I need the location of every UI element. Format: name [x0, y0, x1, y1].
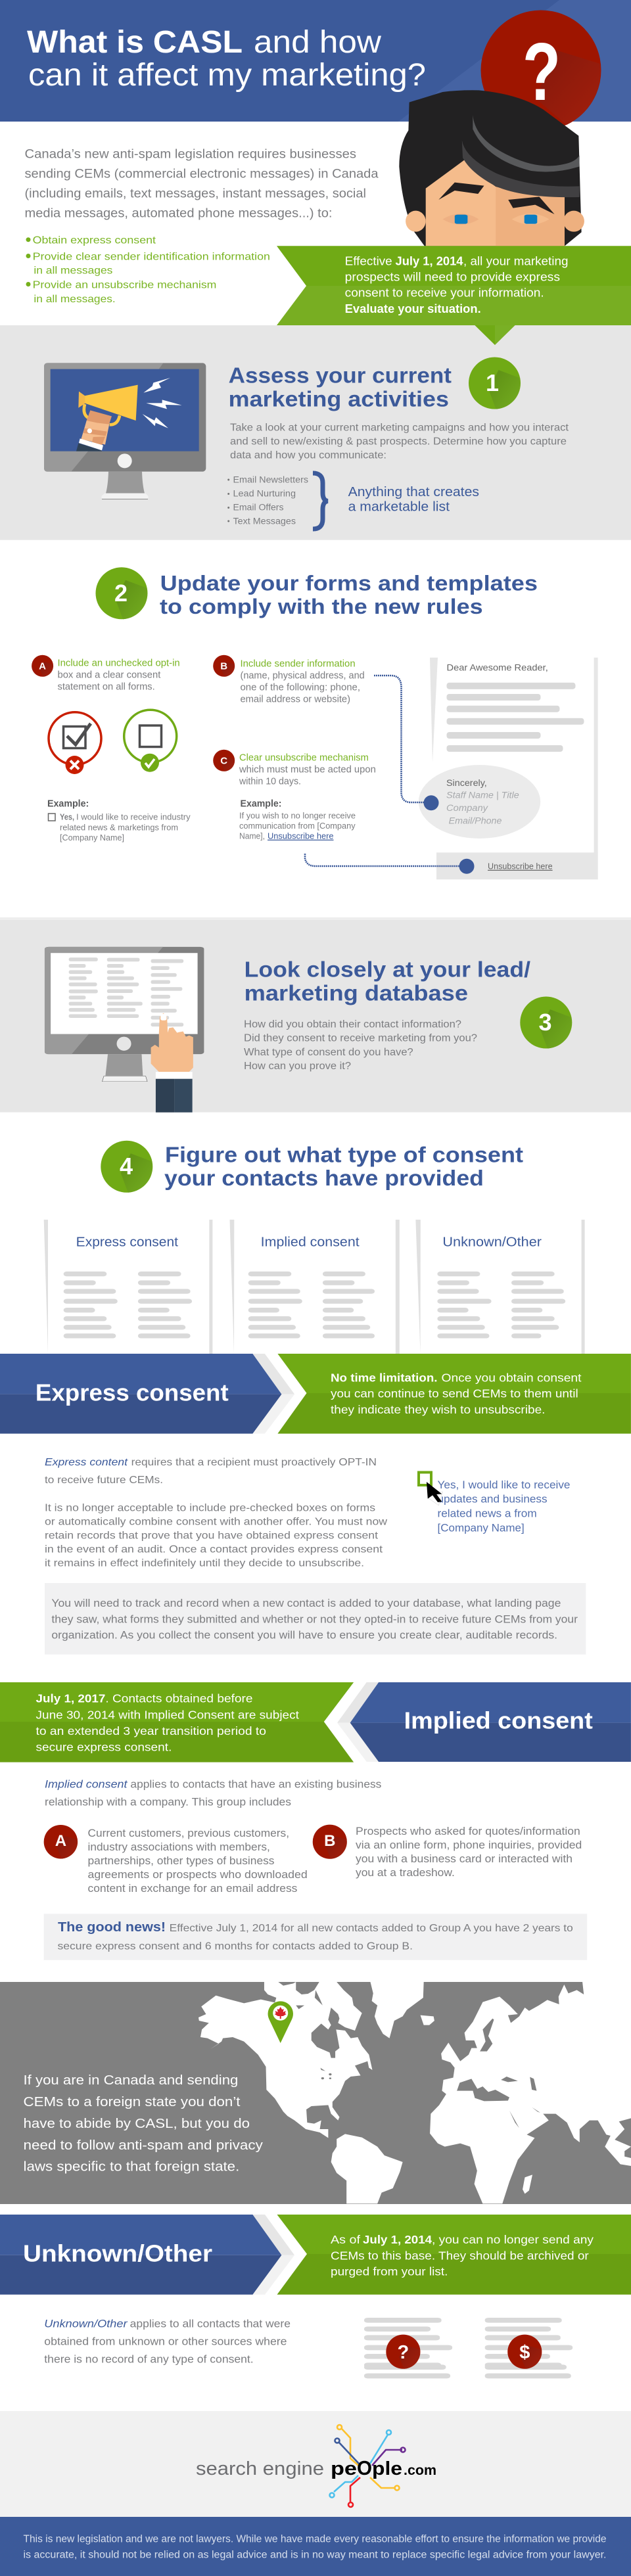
document: implied consent: Implied consent [261, 1235, 360, 1250]
heading: figure out what type of consent: Figure out what type of consent [165, 1143, 523, 1167]
banner: express consent [0, 1354, 631, 1434]
banner: express consent: Express consent [35, 1379, 229, 1406]
icon: number 4 badge [101, 1141, 152, 1193]
banner: unknown/other: , you can no longer send any [432, 2233, 594, 2246]
icon: document with question badge [364, 2318, 452, 2378]
callout: tracking records [45, 1583, 586, 1655]
document: express consent: Express consent [76, 1235, 178, 1250]
text: assess description: and sell to new/existing & past prospects. Determine how you capture [230, 436, 567, 448]
group A: agreements or prospects who downloaded [88, 1869, 308, 1881]
email mockup: Dear Awesome Reader, [447, 662, 548, 673]
heading: figure out what type of consent [164, 1143, 523, 1191]
world map panel [0, 1982, 631, 2204]
callout: the good news: secure express consent and 6 months for contacts added to Group B. [58, 1941, 413, 1952]
item C: unsubscribe mechanism: Clear unsubscribe mechanism [239, 752, 369, 763]
banner: express consent: No time limitation. [331, 1371, 438, 1384]
icon: number 2 badge [96, 567, 147, 619]
item C: unsubscribe mechanism: which must must be acted upon [239, 764, 376, 775]
green bullet list: in all messages. [34, 294, 116, 305]
signature bubble [419, 765, 540, 839]
example: unsubscribe statement: If you wish to no longer receive [239, 812, 356, 821]
banner: implied consent: June 30, 2014 with Implied Consent are subject [35, 1708, 299, 1721]
text: assess description: data and how you communicate: [230, 449, 386, 461]
signature bubble: Email/Phone [449, 816, 502, 825]
signature bubble: Sincerely, [446, 778, 487, 788]
icon: monitor with database and hand [45, 947, 204, 1113]
banner: unknown/other: CEMs to this base. They should be archived or [331, 2249, 589, 2262]
list: marketing channels: Email Offers [233, 503, 284, 513]
group A: A [55, 1832, 66, 1850]
heading: look closely at your lead/marketing database: Look closely at your lead/ [245, 958, 530, 982]
callout: the good news: The good news! [58, 1920, 166, 1935]
panel: section 3 background [0, 917, 631, 1113]
text: foreign state notice: laws specific to that foreign state. [24, 2160, 239, 2174]
text: database questions: How did you obtain their contact information? [244, 1019, 461, 1030]
list: marketing channels: Text Messages [233, 516, 296, 526]
text: assess description: Take a look at your current marketing campaigns and how you interact [230, 423, 569, 434]
callout: effective date banner [277, 246, 631, 345]
icon: document with dollar badge [485, 2318, 573, 2378]
item A: unchecked opt-in: Include an unchecked opt-in [58, 658, 180, 668]
unsubscribe link in footer: Unsubscribe here [488, 862, 553, 871]
callout: effective date banner: , all your marketing [463, 254, 568, 267]
group B: B [324, 1832, 335, 1850]
intro paragraph: media messages, automated phone messages...) to: [25, 207, 333, 221]
example: unsubscribe statement: communication from [Company [239, 821, 356, 831]
icon: number 1 badge [469, 357, 521, 409]
text: foreign state notice [24, 2073, 263, 2174]
footer disclaimer: This is new legislation and we are not lawyers. While we have made every reasonable effort to ensure the information we provide [24, 2533, 606, 2544]
banner: implied consent: . Contacts obtained before [105, 1692, 252, 1705]
icon: number 3 badge: 3 [538, 1009, 552, 1036]
group A: partnerships, other types of business [88, 1855, 275, 1867]
title [27, 25, 426, 93]
item A: unchecked opt-in: box and a clear consent [58, 670, 160, 680]
heading: look closely at your lead/marketing database [245, 958, 530, 1005]
text: express consent explanation [45, 1457, 387, 1569]
text: express consent explanation: in the event of an audit. Once a contact provides express consent [45, 1544, 383, 1555]
icon: curly brace [313, 473, 328, 529]
banner: express consent: you can continue to send CEMs to them until [331, 1387, 578, 1400]
character illustration [399, 90, 584, 246]
item C: unsubscribe mechanism [213, 750, 376, 787]
example: consent statement: Example: [47, 799, 89, 810]
icon: monitor with megaphone [44, 363, 206, 499]
green bullet list: Provide an unsubscribe mechanism [33, 279, 216, 290]
text: express consent explanation: retain records that prove that you have obtained express consent [45, 1530, 379, 1541]
footer disclaimer: is accurate, it should not be relied on as legal advice and is in no way meant to replace specific legal advice from your lawyer. [24, 2549, 606, 2560]
item B: sender information: one of the following: phone, [241, 682, 360, 693]
text: anything that creates a marketable list: a marketable list [348, 499, 450, 514]
callout: effective date banner: July 1, 2014 [396, 254, 463, 267]
example: unsubscribe statement: Example: [241, 799, 281, 810]
icon: red question circle [481, 11, 601, 130]
text: anything that creates a marketable list [348, 485, 479, 514]
callout: effective date banner: Effective [345, 254, 392, 267]
group A [44, 1825, 308, 1895]
example: consent statement: related news & marketings from [60, 823, 178, 832]
text: unknown/other explanation: obtained from unknown or other sources where [44, 2336, 287, 2348]
text: unknown/other explanation: there is no record of any type of consent. [44, 2354, 254, 2366]
item A: unchecked opt-in [32, 655, 180, 692]
text: foreign state notice: need to follow anti-spam and privacy [24, 2138, 263, 2153]
banner: unknown/other: Unknown/Other [23, 2240, 212, 2267]
icon: correct unchecked box [124, 710, 177, 772]
banner: implied consent [0, 1682, 631, 1762]
signature bubble: Staff Name | Title [446, 790, 519, 800]
item A: unchecked opt-in: statement on all forms. [58, 681, 155, 692]
example: unsubscribe statement [239, 799, 356, 841]
example: opt-in checkbox with cursor: related news a from [438, 1508, 537, 1520]
banner: unknown/other [0, 2215, 631, 2295]
item B: sender information [213, 655, 365, 704]
item B: sender information: (name, physical address, and [241, 670, 365, 681]
example: unsubscribe statement: Name], [239, 832, 265, 841]
heading: look closely at your lead/marketing database: marketing database [245, 982, 468, 1005]
example: consent statement [47, 799, 191, 842]
text: express consent explanation: It is no longer acceptable to include pre-checked boxes on forms [45, 1502, 375, 1513]
callout: tracking records: they saw, what forms they submitted and whether or not they opted-in to receive future CEMs from your [51, 1613, 578, 1625]
group B: via an online form, phone inquiries, provided [356, 1839, 582, 1851]
banner: unknown/other: July 1, 2014 [363, 2233, 432, 2246]
example: opt-in checkbox with cursor: updates and business [438, 1494, 548, 1506]
group A: content in exchange for an email address [88, 1883, 297, 1895]
banner: implied consent: Implied consent [404, 1707, 593, 1734]
logo: search engine people: search engine [196, 2458, 324, 2479]
icon: number 2 badge: 2 [114, 580, 128, 607]
text: implied consent explanation [45, 1778, 381, 1808]
icon: wrong pre-checked box [49, 712, 101, 774]
item B: sender information: B [220, 661, 227, 672]
item C: unsubscribe mechanism: within 10 days. [239, 776, 301, 787]
icon: number 3 badge [520, 996, 572, 1049]
title: What is CASL [27, 25, 243, 60]
text: unknown/other explanation: Unknown/Other [44, 2318, 128, 2330]
heading: figure out what type of consent: your contacts have provided [164, 1166, 484, 1191]
group A: industry associations with members, [88, 1841, 270, 1853]
intro paragraph: sending CEMs (commercial electronic messages) in Canada [25, 168, 379, 181]
text: assess description [230, 423, 569, 461]
callout: effective date banner: prospects will need to provide express [345, 271, 560, 284]
group B: you at a tradeshow. [356, 1867, 455, 1879]
panel: section 1 background [0, 325, 631, 540]
example: opt-in checkbox with cursor [419, 1472, 571, 1534]
callout: effective date banner: Evaluate your situation. [345, 302, 481, 315]
callout: tracking records: You will need to track and record when a new contact is added to your database, what landing page [51, 1598, 561, 1609]
intro paragraph [25, 148, 379, 221]
green bullet list: in all messages [34, 265, 112, 277]
panel: logo footer [0, 2411, 631, 2517]
header banner [0, 0, 631, 130]
banner: implied consent: secure express consent. [35, 1740, 172, 1753]
group B: you with a business card or interacted with [356, 1853, 573, 1865]
green bullet list [26, 235, 270, 305]
text: database questions: Did they consent to receive marketing from you? [244, 1033, 477, 1044]
document: unknown/other: Unknown/Other [442, 1235, 542, 1250]
text: express consent explanation: requires that a recipient must proactively OPT-IN [131, 1457, 377, 1468]
logo: search engine people: pe [331, 2458, 357, 2479]
intro paragraph: Canada’s new anti-spam legislation requires businesses [25, 148, 356, 162]
text: express consent explanation: to receive future CEMs. [45, 1475, 163, 1486]
icon: number 4 badge: 4 [120, 1153, 133, 1180]
logo: search engine people: .com [404, 2463, 436, 2478]
list: marketing channels: Email Newsletters [233, 474, 308, 484]
callout: the good news [44, 1914, 587, 1960]
item A: unchecked opt-in: A [39, 661, 46, 672]
example: consent statement: I would like to receive industry [76, 813, 191, 822]
group B: Prospects who asked for quotes/information [356, 1826, 580, 1837]
banner: implied consent: to an extended 3 year transition period to [35, 1724, 266, 1737]
icon: Canada location pin [268, 2001, 293, 2043]
callout: tracking records: organization. As you collect the consent you will have to ensure you create clear, auditable records. [51, 1629, 557, 1641]
document: express consent [44, 1220, 212, 1354]
example: opt-in checkbox with cursor: Yes, I would like to receive [438, 1479, 571, 1491]
icon: number 1 badge: 1 [486, 369, 499, 396]
heading: update your forms and templates: Update your forms and templates [160, 571, 538, 595]
text: implied consent explanation: applies to contacts that have an existing business [130, 1778, 381, 1790]
text: express consent explanation: or automatically combine consent with another offer. You must now [45, 1516, 387, 1527]
icon: document with dollar badge: $ [519, 2342, 530, 2363]
text: express consent explanation: Express content [45, 1457, 128, 1468]
item C: unsubscribe mechanism: C [220, 756, 227, 766]
text: database questions: How can you prove it? [244, 1061, 351, 1072]
text: anything that creates a marketable list: Anything that creates [348, 485, 479, 499]
email mockup [419, 658, 598, 879]
callout: effective date banner: consent to receive your information. [345, 287, 544, 300]
logo: search engine people: O [357, 2456, 372, 2479]
arrow: unsubscribe connector [305, 854, 475, 874]
example: opt-in checkbox with cursor: [Company Name] [438, 1523, 525, 1534]
banner: unknown/other: purged from your list. [331, 2265, 448, 2278]
document: implied consent [230, 1220, 400, 1354]
text: foreign state notice: If you are in Canada and sending [24, 2073, 238, 2088]
logo: search engine people: ple [372, 2458, 402, 2479]
text: database questions [244, 1019, 477, 1072]
text: foreign state notice: CEMs to a foreign state you don’t [24, 2095, 241, 2109]
text: unknown/other explanation [44, 2318, 291, 2366]
example: unsubscribe statement: Unsubscribe here [268, 832, 334, 841]
banner: unknown/other: As of [331, 2233, 360, 2246]
banner: express consent: they indicate they wish to unsubscribe. [331, 1403, 546, 1416]
heading: update your forms and templates: to comply with the new rules [160, 595, 483, 618]
arrow: sender information connector [374, 676, 439, 810]
text: foreign state notice: have to abide by CASL, but you do [24, 2117, 250, 2131]
document: unknown/other [415, 1220, 585, 1354]
footer disclaimer [0, 2517, 631, 2576]
example: consent statement: Yes, [60, 813, 74, 822]
heading: update your forms and templates [160, 571, 538, 618]
heading: assess your current marketing activities: Assess your current [229, 364, 452, 388]
group B [313, 1825, 582, 1879]
title: and how [254, 25, 381, 60]
text: implied consent explanation: relationship with a company. This group includes [45, 1796, 291, 1808]
heading: assess your current marketing activities [229, 364, 452, 411]
text: implied consent explanation: Implied consent [45, 1778, 128, 1790]
icon: red question circle: ? [523, 27, 561, 118]
list: marketing channels: Lead Nurturing [233, 489, 296, 499]
heading: assess your current marketing activities: marketing activities [229, 387, 449, 411]
example: consent statement: [Company Name] [60, 833, 124, 842]
logo: search engine people [196, 2425, 436, 2507]
text: database questions: What type of consent do you have? [244, 1047, 413, 1058]
callout: the good news: Effective July 1, 2014 for all new contacts added to Group A you have 2 years to [170, 1923, 573, 1934]
title: can it affect my marketing? [28, 58, 426, 93]
icon: document with question badge: ? [398, 2342, 409, 2363]
text: unknown/other explanation: applies to all contacts that were [130, 2318, 291, 2330]
item B: sender information: Include sender information [241, 658, 356, 669]
item B: sender information: email address or website) [241, 694, 350, 704]
green bullet list: Obtain express consent [33, 235, 156, 246]
signature bubble: Company [446, 803, 488, 813]
intro paragraph: (including emails, text messages, instant messages, social [25, 187, 366, 201]
text: express consent explanation: it remains in effect indefinitely until they decide to unsubscribe. [45, 1557, 364, 1569]
list: marketing channels [227, 474, 308, 526]
green bullet list: Provide clear sender identification information [33, 251, 270, 262]
banner: express consent: Once you obtain consent [442, 1371, 582, 1384]
group A: Current customers, previous customers, [88, 1828, 289, 1839]
banner: implied consent: July 1, 2017 [35, 1692, 105, 1705]
